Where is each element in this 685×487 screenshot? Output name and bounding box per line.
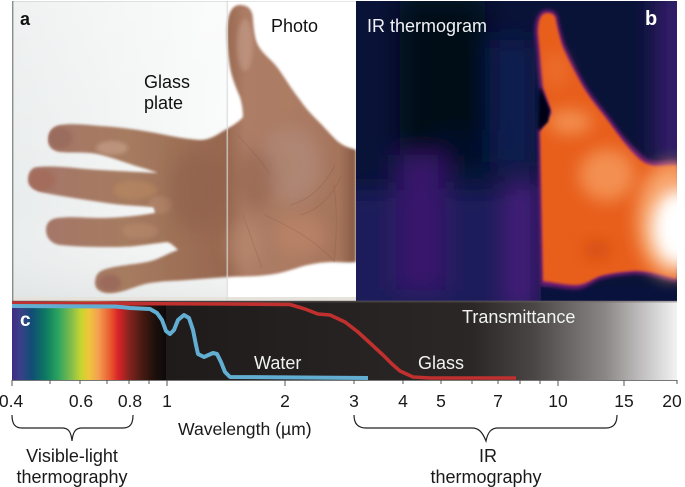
label: Glass plate: Glass — [144, 72, 190, 92]
icon: hand — [28, 5, 356, 293]
label: Glass: Glass — [418, 353, 464, 373]
label: b: b — [645, 8, 657, 30]
axis numbers: 5 — [436, 391, 446, 411]
axis numbers: 7 — [493, 391, 503, 411]
palm creases — [238, 135, 342, 268]
label: IR thermogram: IR thermogram — [367, 16, 487, 36]
band: infrared — [166, 301, 677, 380]
spectrum band: visible light — [12, 301, 166, 380]
label: IR thermography: thermography — [430, 467, 542, 487]
label: Visible-light thermography: Visible-light — [26, 446, 118, 466]
axis numbers: 20 — [662, 391, 682, 411]
tick marks — [12, 380, 677, 386]
label: Water: Water — [254, 353, 301, 373]
axis numbers: 4 — [398, 391, 408, 411]
axis numbers: 0.8 — [118, 391, 142, 411]
axis numbers: 10 — [548, 391, 568, 411]
curve: water transmittance — [12, 306, 368, 378]
axis numbers: 1 — [162, 391, 172, 411]
label: Visible-light thermography: thermography — [16, 467, 128, 487]
panel c: transmittance spectrum — [12, 300, 677, 381]
thermal hand — [535, 10, 685, 289]
glass plate edge — [226, 1, 228, 301]
axis title: Wavelength (µm) — [178, 419, 312, 439]
label: IR thermography: IR — [479, 446, 497, 466]
axis numbers — [0, 391, 682, 411]
axis numbers: 0.6 — [69, 391, 93, 411]
label: Glass plate: plate — [144, 93, 183, 113]
label: Transmittance: Transmittance — [462, 307, 575, 327]
label: Photo: Photo — [271, 16, 318, 36]
curve: glass transmittance — [12, 303, 516, 378]
wavelength axis — [0, 380, 682, 439]
panel a: photo of hand behind glass plate — [12, 0, 356, 301]
dark notch by thumb — [538, 87, 550, 131]
axis numbers: 3 — [349, 391, 359, 411]
panel b: IR thermogram — [356, 1, 677, 301]
label: a: a — [20, 9, 31, 29]
axis numbers: 2 — [280, 391, 290, 411]
axis numbers: 15 — [614, 391, 634, 411]
bracket: visible-light — [12, 415, 133, 441]
label: c: c — [20, 310, 31, 331]
bracket: IR — [354, 415, 617, 441]
